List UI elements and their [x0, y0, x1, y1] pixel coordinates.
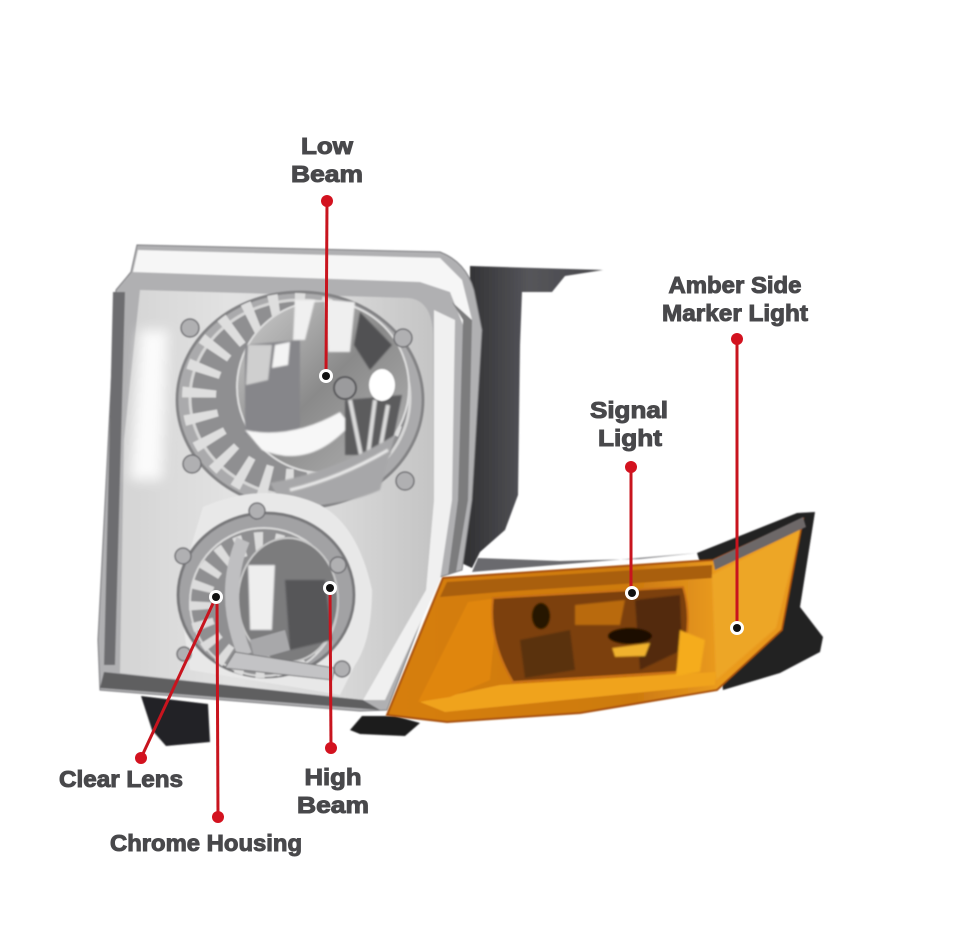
callout: chrome housing — [209, 590, 224, 823]
label: low beam: Low — [301, 133, 353, 159]
left dark edge of lens — [104, 292, 125, 665]
low beam outer bezel — [177, 292, 423, 508]
low beam reflector — [237, 301, 409, 473]
headlight assembly — [98, 245, 823, 746]
label: signal light: Light — [598, 425, 662, 451]
screws lower — [175, 503, 350, 677]
low beam bulb — [334, 377, 356, 399]
callout lines and dots — [135, 195, 744, 823]
low beam unit — [177, 292, 423, 508]
upper amber band — [440, 565, 712, 597]
callout: clear lens — [135, 597, 216, 764]
white left glow — [130, 330, 168, 480]
callout: high beam — [323, 581, 337, 754]
chrome lens body — [98, 245, 482, 711]
high beam ring — [178, 513, 354, 677]
signal bulb cavity — [492, 587, 688, 682]
label: amber side marker light — [662, 272, 808, 326]
lower trim piece — [350, 716, 420, 736]
label: chrome housing: Chrome Housing — [110, 830, 302, 856]
cavity details — [520, 595, 705, 678]
label: clear lens: Clear Lens — [59, 766, 183, 792]
label: low beam — [291, 133, 363, 187]
chrome right edge — [363, 310, 455, 700]
label: high beam: Beam — [297, 792, 369, 818]
high beam reflector — [238, 538, 338, 662]
rear housing and mounting tab — [455, 266, 823, 690]
high beam lens area — [190, 528, 338, 676]
top lens strip — [133, 250, 472, 325]
amber signal lens — [387, 517, 806, 722]
label: high beam — [297, 764, 369, 818]
high beam lower ribs — [225, 652, 335, 680]
screws upper — [181, 319, 414, 490]
dark top rim of amber lens — [713, 517, 806, 570]
high beam chrome sweep — [178, 493, 372, 695]
lower mounting bracket — [141, 696, 210, 746]
label: signal light — [590, 397, 668, 451]
label: amber side marker light: Amber Side — [668, 272, 802, 298]
low beam ribbed crescent — [190, 300, 410, 496]
callout: low beam — [319, 195, 333, 383]
reflections in reflector — [245, 300, 402, 504]
inner housing — [120, 290, 434, 700]
callout: amber side marker — [730, 333, 744, 635]
label: amber side marker light: Marker Light — [662, 300, 808, 326]
callout: signal light — [625, 461, 639, 600]
left amber panel — [418, 598, 498, 702]
bright lower strip — [420, 672, 716, 712]
amber outer shape — [387, 519, 803, 722]
bottom edge of lens — [100, 672, 380, 710]
label: high beam: High — [304, 764, 362, 790]
label: low beam: Beam — [291, 161, 363, 187]
label: signal light: Signal — [590, 397, 668, 423]
light amber side marker — [712, 530, 800, 680]
high beam unit — [175, 493, 372, 695]
low beam bright highlight — [369, 369, 395, 401]
